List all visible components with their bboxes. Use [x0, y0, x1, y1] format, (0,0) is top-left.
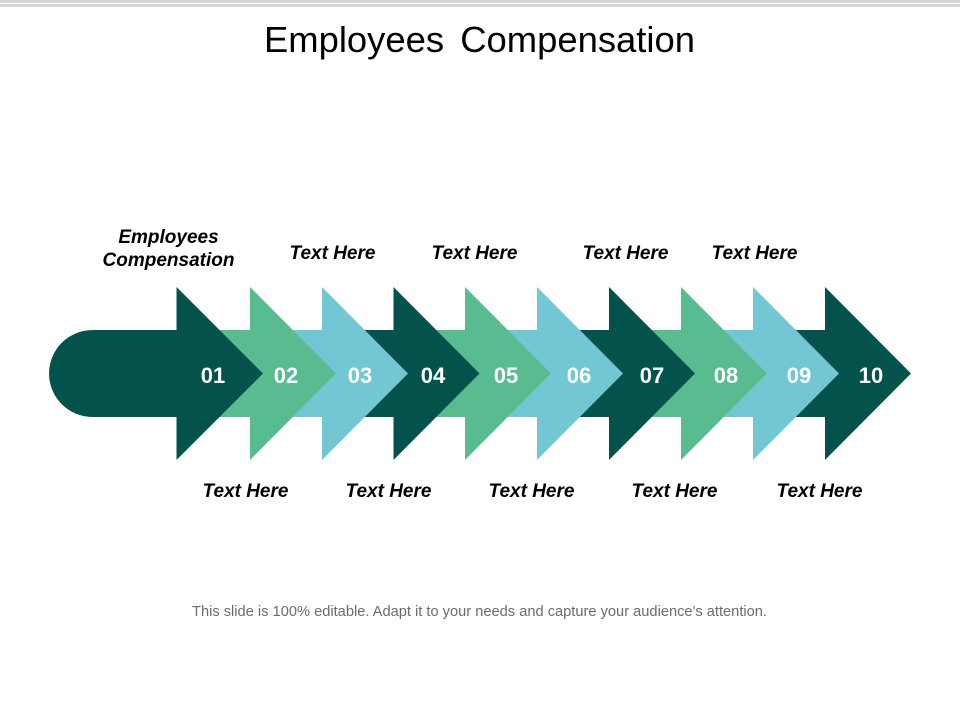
step numbers: 05 — [494, 363, 518, 388]
arrow 05 — [420, 287, 551, 460]
step numbers: 07 — [640, 363, 664, 388]
top labels: Text Here — [583, 243, 669, 264]
step numbers: 08 — [714, 363, 738, 388]
footer caption: This slide is 100% editable. Adapt it to your needs and capture your audience's attention. — [192, 604, 767, 620]
arrow 04 — [348, 287, 480, 460]
arrow 02 — [205, 287, 336, 460]
arrow 10 — [780, 287, 911, 460]
arrow 08 — [636, 287, 767, 460]
step numbers: 09 — [787, 363, 811, 388]
arrow 09 — [708, 287, 839, 460]
top labels: Text Here — [432, 243, 518, 264]
step numbers: 04 — [421, 363, 446, 388]
top labels — [103, 227, 798, 271]
top labels: Text Here — [290, 243, 376, 264]
arrow 07 — [564, 287, 695, 460]
step numbers: 01 — [201, 363, 225, 388]
step numbers: 10 — [859, 363, 883, 388]
top labels: Employees — [118, 227, 219, 248]
top double rule — [0, 0, 960, 7]
arrow 03 — [277, 287, 408, 460]
bottom labels: Text Here — [777, 481, 863, 502]
bottom labels: Text Here — [489, 481, 575, 502]
arrow 01 with rounded tail — [49, 287, 263, 460]
bottom labels: Text Here — [203, 481, 289, 502]
step numbers: 06 — [567, 363, 591, 388]
arrow 06 — [492, 287, 623, 460]
title: Employees Compensation — [264, 19, 695, 60]
bottom labels — [203, 481, 863, 502]
step numbers: 03 — [348, 363, 372, 388]
arrow chain — [49, 287, 911, 460]
top labels: Compensation — [103, 250, 234, 271]
step numbers: 02 — [274, 363, 298, 388]
step numbers — [201, 363, 883, 388]
bottom labels: Text Here — [632, 481, 718, 502]
top labels: Text Here — [712, 243, 798, 264]
bottom labels: Text Here — [346, 481, 432, 502]
